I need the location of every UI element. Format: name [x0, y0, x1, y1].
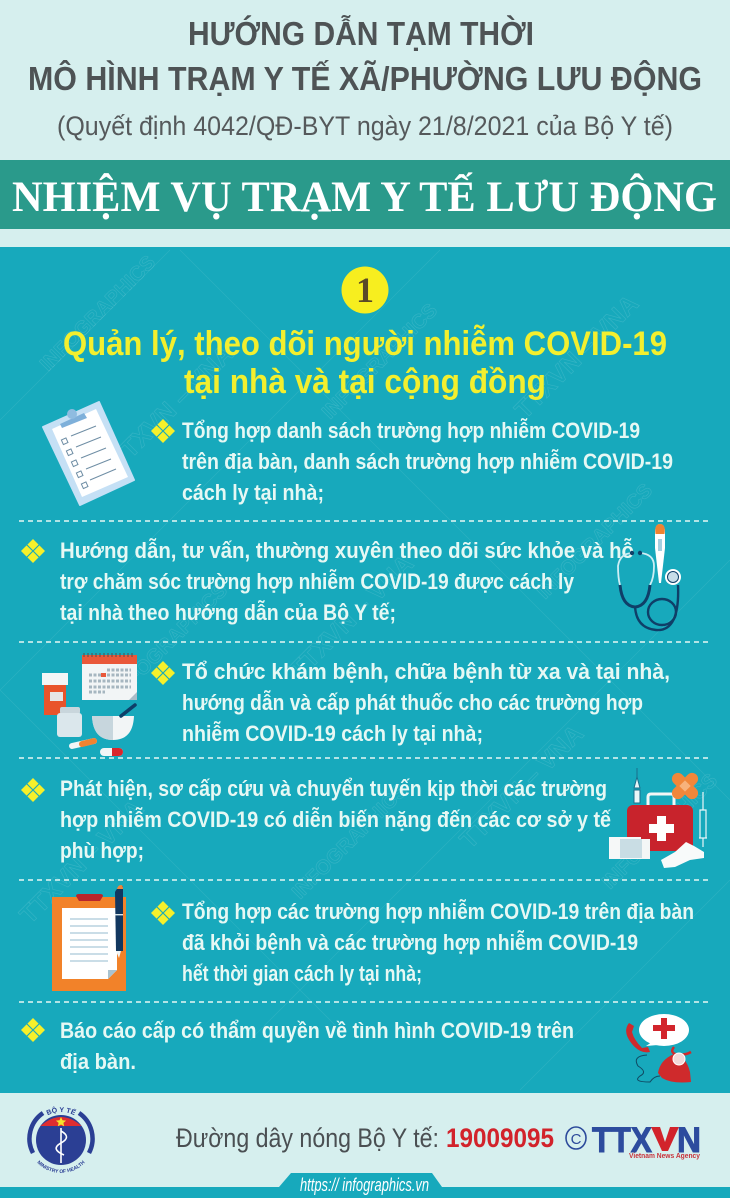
hotline: 19009095 [446, 1123, 554, 1153]
item 4: hợp nhiễm COVID-19 có diễn biến nặng đến các cơ sở y tế [60, 807, 612, 832]
watermarks: INFOGRAPHICS [108, 580, 232, 704]
watermarks [0, 250, 730, 1090]
item 4: Phát hiện, sơ cấp cứu và chuyển tuyến kịp thời các trường [60, 776, 607, 801]
icon: stethoscope and thermometer [618, 524, 681, 630]
item 5: hết thời gian cách ly tại nhà; [182, 961, 422, 986]
logo: TTXVN [566, 1121, 701, 1160]
hotline: Đường dây nóng Bộ Y tế: [176, 1123, 439, 1153]
icon: first aid kit [609, 763, 708, 868]
panel: task 1 [0, 247, 730, 1093]
item 2: tại nhà theo hướng dẫn của Bộ Y tế; [60, 600, 396, 625]
watermarks: INFOGRAPHICS [598, 770, 722, 894]
bullet 6 [21, 1018, 45, 1042]
icon: checklist clipboard [43, 402, 134, 505]
icon: emergency phone [626, 1014, 691, 1082]
watermarks: TTXVN – VNA [14, 795, 149, 929]
watermarks: INFOGRAPHICS [318, 300, 442, 424]
bullet 4 [21, 778, 45, 802]
item 2: Hướng dẫn, tư vấn, thường xuyên theo dõi sức khỏe và hỗ [60, 538, 634, 563]
item 3: nhiễm COVID-19 cách ly tại nhà; [182, 721, 483, 746]
banner: heading [0, 160, 730, 229]
footer [0, 1106, 730, 1198]
item 1: cách ly tại nhà; [182, 480, 324, 505]
logo: Ministry of Health [27, 1106, 95, 1173]
item 6: địa bàn. [60, 1049, 136, 1074]
bullet 3 [151, 661, 175, 685]
watermarks: TTXVN – VNA [284, 550, 419, 684]
panel heading [63, 325, 667, 401]
item 1: Tổng hợp danh sách trường hợp nhiễm COVID-19 [182, 418, 640, 443]
item 3: Tổ chức khám bệnh, chữa bệnh từ xa và tại nhà, [182, 659, 670, 684]
logo: Ministry of Health: MINISTRY OF HEALTH [37, 1160, 85, 1173]
watermarks: INFOGRAPHICS [36, 252, 160, 376]
watermarks: TTXVN – VNA [454, 720, 589, 854]
bullet 2 [21, 539, 45, 563]
title: HƯỚNG DẪN TẠM THỜI [188, 15, 534, 52]
bullet 5 [151, 901, 175, 925]
banner: heading: NHIỆM VỤ TRẠM Y TẾ LƯU ĐỘNG [12, 173, 717, 221]
item 1 [151, 418, 673, 505]
watermarks: TTXVN – VNA [509, 290, 644, 424]
item 3 [151, 659, 670, 746]
website tab: https:// infographics.vn [300, 1175, 429, 1195]
logo: TTXVN: N [677, 1121, 701, 1160]
watermarks: INFOGRAPHICS [533, 480, 657, 604]
website tab [0, 1173, 730, 1198]
panel heading: Quản lý, theo dõi người nhiễm COVID-19 [63, 325, 667, 363]
item 3: hướng dẫn và cấp phát thuốc cho các trường hợp [182, 690, 643, 715]
item 4: phù hợp; [60, 838, 144, 863]
logo: TTXVN: TTX [592, 1121, 653, 1160]
logo: TTXVN: Vietnam News Agency [629, 1153, 700, 1160]
number badge [342, 266, 388, 314]
logo: TTXVN: C [571, 1131, 582, 1148]
item 6 [21, 1018, 574, 1074]
icon: orange clipboard and pen [52, 885, 126, 991]
item 2: trợ chăm sóc trường hợp nhiễm COVID-19 được cách ly [60, 569, 575, 594]
item 1: trên địa bàn, danh sách trường hợp nhiễm COVID-19 [182, 449, 673, 474]
item 5 [151, 899, 694, 986]
item 5: đã khỏi bệnh và các trường hợp nhiễm COVID-19 [182, 930, 638, 955]
logo: Ministry of Health: BỘ Y TẾ [46, 1106, 76, 1116]
icon: calendar and medicines [42, 653, 137, 756]
watermarks: INFOGRAPHICS [288, 780, 412, 904]
item 4 [21, 776, 612, 863]
subtitle: (Quyết định 4042/QĐ-BYT ngày 21/8/2021 của Bộ Y tế) [57, 111, 673, 141]
item 2 [21, 538, 634, 625]
item 6: Báo cáo cấp có thẩm quyền về tình hình COVID-19 trên [60, 1018, 574, 1043]
panel heading: tại nhà và tại cộng đồng [184, 363, 546, 401]
title [28, 15, 702, 97]
number badge: 1 [356, 270, 374, 310]
bullet 1 [151, 419, 175, 443]
watermarks: TTXVN – VNA [104, 340, 239, 474]
